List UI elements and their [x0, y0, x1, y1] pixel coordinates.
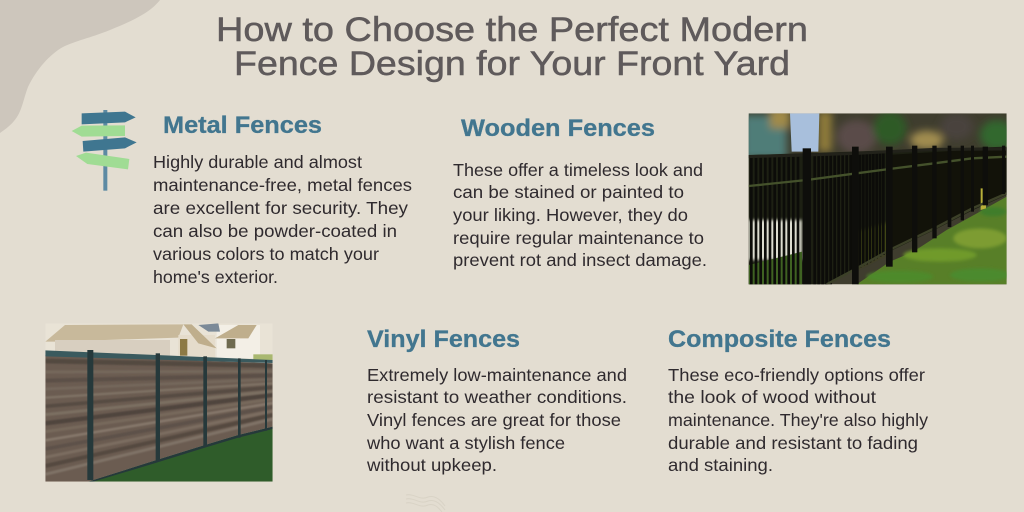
- text: wooden fences description: [453, 160, 707, 270]
- panel: vinyl fences: [366, 326, 627, 475]
- text: vinyl fences description: Extremely low-maintenance and: [367, 365, 627, 385]
- text: metal fences description: Highly durable and almost: [153, 152, 362, 172]
- text: vinyl fences description: without upkeep.: [366, 455, 497, 475]
- text: wooden fences description: require regular maintenance to: [453, 228, 704, 248]
- decorative faint wave: [406, 495, 445, 512]
- decorative corner blob: [0, 0, 160, 133]
- text: metal fences description: [153, 152, 412, 287]
- heading: vinyl fences: Vinyl Fences: [367, 326, 520, 353]
- text: wooden fences description: can be stained or painted to: [453, 182, 684, 202]
- icon: signpost: [72, 110, 137, 191]
- text: metal fences description: home's exterior.: [153, 267, 278, 287]
- text: wooden fences description: your liking. However, they do: [453, 205, 688, 225]
- text: metal fences description: various colors to match your: [153, 244, 379, 264]
- panel: composite fences: [668, 326, 928, 475]
- text: metal fences description: maintenance-free, metal fences: [153, 175, 412, 195]
- text: vinyl fences description: who want a stylish fence: [366, 433, 565, 453]
- heading: composite fences: Composite Fences: [668, 326, 891, 353]
- text: composite fences description: and staining.: [668, 455, 773, 475]
- panel: metal fences: [153, 112, 412, 287]
- text: composite fences description: These eco-friendly options offer: [668, 365, 925, 385]
- text: composite fences description: the look of wood without: [668, 387, 876, 407]
- photo: black metal fence on a lawn: [743, 108, 1013, 284]
- title: How to Choose the Perfect Modern: [216, 11, 808, 49]
- text: vinyl fences description: Vinyl fences are great for those: [367, 410, 621, 430]
- text: metal fences description: can also be powder-coated in: [153, 221, 397, 241]
- title: Fence Design for Your Front Yard: [234, 45, 790, 83]
- heading: wooden fences: Wooden Fences: [461, 115, 655, 142]
- text: vinyl fences description: [366, 365, 627, 475]
- heading: metal fences: Metal Fences: [163, 112, 322, 139]
- text: metal fences description: are excellent for security. They: [153, 198, 408, 218]
- text: wooden fences description: prevent rot and insect damage.: [453, 250, 707, 270]
- text: composite fences description: maintenance. They're also highly: [668, 410, 928, 430]
- text: composite fences description: [668, 365, 928, 475]
- photo: horizontal wood fence with dark posts: [45, 323, 273, 482]
- text: composite fences description: durable and resistant to fading: [668, 433, 918, 453]
- text: wooden fences description: These offer a timeless look and: [453, 160, 703, 180]
- title: [216, 11, 808, 83]
- text: vinyl fences description: resistant to weather conditions.: [367, 387, 627, 407]
- panel: wooden fences: [453, 115, 707, 270]
